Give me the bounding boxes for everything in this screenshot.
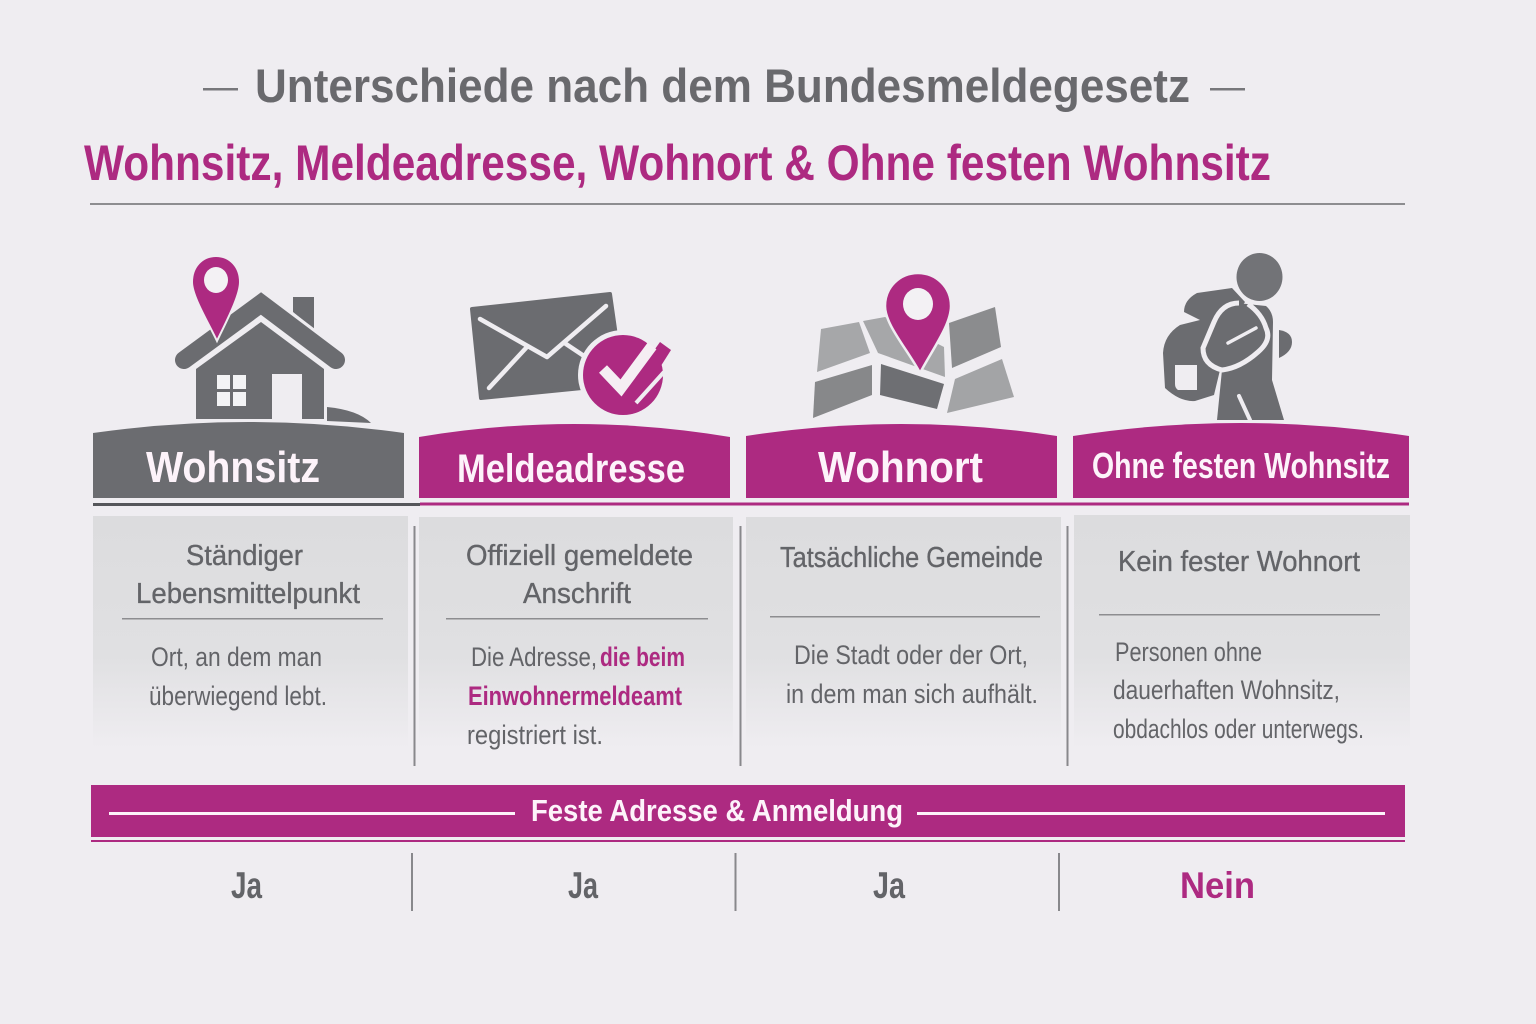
panel header: Wohnsitz: Wohnsitz (146, 443, 320, 492)
row: Ja / Nein answers: Ja (568, 865, 598, 906)
panel: Ohne festen Wohnsitz definition (1074, 515, 1410, 748)
banner: Feste Adresse & Anmeldung: Feste Adresse & Anmeldung (531, 793, 903, 828)
panel: Meldeadresse definition: registriert ist. (467, 720, 603, 750)
title: Unterschiede nach dem Bundesmeldegesetz (255, 59, 1190, 112)
icon: house with location pin (184, 256, 371, 423)
panel: Meldeadresse definition: Offiziell gemeldete (466, 540, 693, 572)
icon: backpacker (1163, 253, 1292, 420)
panel: Wohnort definition: Tatsächliche Gemeinde (780, 542, 1043, 574)
row: Ja / Nein answers: Ja (873, 865, 905, 906)
panel: Wohnsitz definition: überwiegend lebt. (149, 681, 327, 711)
subtitle: Wohnsitz, Meldeadresse, Wohnort & Ohne festen Wohnsitz (84, 135, 1271, 191)
panel header: Wohnsitz (93, 422, 404, 498)
panel header: Ohne festen Wohnsitz (1073, 423, 1409, 498)
panel: Meldeadresse definition: Die Adresse, (471, 642, 597, 672)
icon: map with location pin (813, 273, 1014, 418)
panel header: Meldeadresse: Meldeadresse (457, 447, 685, 491)
panel: Ohne festen Wohnsitz definition: obdachlos oder unterwegs. (1113, 714, 1364, 744)
panel: Wohnsitz definition: Lebensmittelpunkt (136, 578, 360, 610)
panel: Meldeadresse definition (419, 517, 733, 750)
row: Ja / Nein answers: Nein (1180, 865, 1255, 906)
panel header: Meldeadresse (419, 424, 730, 498)
panel: Wohnort definition (746, 517, 1061, 748)
banner: Feste Adresse & Anmeldung (91, 785, 1405, 842)
icon: envelope with check badge (472, 294, 671, 420)
panel: Ohne festen Wohnsitz definition: Kein fester Wohnort (1118, 546, 1360, 578)
panel: Ohne festen Wohnsitz definition: Personen ohne (1115, 637, 1262, 667)
panel: Meldeadresse definition: die beim (600, 642, 685, 672)
panel: Ohne festen Wohnsitz definition: dauerhaften Wohnsitz, (1113, 675, 1340, 705)
row: Ja / Nein answers (231, 853, 1255, 911)
panel header: Ohne festen Wohnsitz: Ohne festen Wohnsitz (1092, 445, 1390, 486)
panel: Wohnsitz definition (93, 516, 408, 748)
panel: Meldeadresse definition: Anschrift (523, 578, 631, 610)
panel: Meldeadresse definition: Einwohnermeldeamt (468, 681, 682, 711)
panel: Wohnort definition: in dem man sich aufhält. (786, 679, 1038, 709)
panel: Wohnort definition: Die Stadt oder der Ort, (794, 640, 1028, 670)
panel: Wohnsitz definition: Ständiger (186, 540, 303, 572)
panel header: Wohnort (746, 424, 1057, 498)
row: Ja / Nein answers: Ja (231, 865, 262, 906)
panel: Wohnsitz definition: Ort, an dem man (151, 642, 322, 672)
panel header: Wohnort: Wohnort (818, 443, 983, 492)
